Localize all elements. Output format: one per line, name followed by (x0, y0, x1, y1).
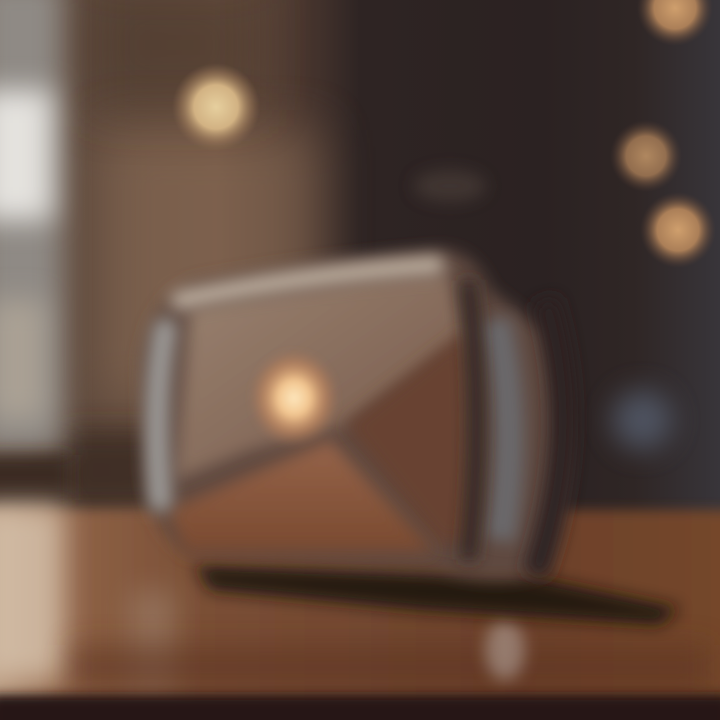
central glow (248, 348, 340, 448)
right strap (495, 320, 509, 540)
bokeh: right middle (610, 120, 682, 192)
object shadow (195, 565, 680, 625)
envelope right panel (345, 330, 470, 545)
left rim highlight (157, 330, 165, 500)
bokeh lights (172, 0, 716, 450)
bokeh: faint centre (414, 170, 486, 202)
top rim highlight (180, 265, 435, 300)
envelope lower flap (168, 440, 435, 552)
background wall and curtain (0, 0, 720, 530)
bokeh: top right (637, 0, 713, 46)
table front edge (0, 696, 720, 720)
envelope object (142, 250, 565, 580)
window light on the left (0, 0, 70, 500)
envelope upper flap (175, 275, 465, 480)
bokeh: upper left (172, 63, 260, 151)
right dark edge (468, 280, 476, 560)
outer dark edge (535, 300, 563, 575)
bokeh: blue reflection (612, 390, 672, 450)
table surface (0, 505, 720, 700)
bokeh: right lower (640, 192, 716, 268)
envelope glass shell (142, 250, 565, 580)
